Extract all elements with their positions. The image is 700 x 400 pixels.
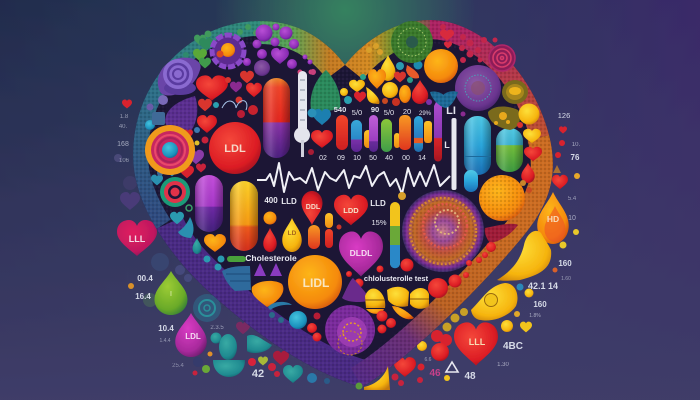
blue and red hearts (308, 108, 333, 155)
labels above capsules: 20 (403, 107, 411, 116)
cholesterol bar chart of capsules (319, 98, 466, 190)
central labels: 15% (371, 218, 387, 227)
right floating numbers: 5.4 (568, 196, 577, 202)
right floating numbers: 6.6 (425, 357, 432, 363)
right floating numbers (425, 111, 581, 382)
labels above capsules (319, 105, 456, 162)
small dots along lower left (192, 322, 330, 384)
heart badge LLL magenta: LLL (129, 234, 146, 244)
purple triangles (254, 263, 282, 276)
purple spiral (158, 58, 201, 96)
heart DDL: DDL (306, 204, 321, 211)
yellow capsule (230, 181, 258, 251)
labels above capsules: 90 (371, 105, 379, 114)
green drop: I (170, 291, 172, 298)
heart LDD: LDD (343, 206, 359, 215)
magenta drop LDL: LDL (185, 332, 201, 341)
orange drop HD (537, 192, 569, 244)
central labels: LLD (370, 199, 386, 208)
red dots near swirl (346, 192, 496, 298)
green dotted mound (310, 69, 340, 111)
large LDL sphere (209, 122, 261, 174)
blue capsule (464, 116, 491, 192)
yellow pills row (365, 287, 429, 319)
thermometer (294, 71, 310, 157)
decorative items outside heart, left side (114, 100, 330, 384)
left floating numbers (117, 114, 264, 380)
large LDL sphere: LDL (224, 143, 246, 155)
ECG line (257, 163, 450, 194)
right floating numbers: 1.60 (561, 276, 571, 282)
central small drops and capsules: LD (288, 230, 297, 237)
decorative items outside heart, right side (392, 111, 581, 386)
purple ring with orange centre (212, 35, 244, 67)
right floating numbers: 10 (568, 215, 576, 222)
purple dotted sphere (325, 305, 375, 355)
purple dotted mound (145, 95, 197, 133)
right floating numbers: 160 (533, 300, 547, 309)
right floating numbers: 1.8% (529, 313, 541, 319)
labels above capsules: 00 (402, 155, 410, 162)
blue block (222, 266, 251, 291)
labels above capsules: 09 (337, 155, 345, 162)
labels above capsules: 40 (385, 155, 393, 162)
labels above capsules: 29% (419, 111, 432, 117)
heart DDL (302, 191, 322, 225)
labels above capsules: 10 (353, 155, 361, 162)
blue green capsule (496, 128, 523, 172)
labels above capsules: 50 (369, 155, 377, 162)
top left cluster (145, 24, 314, 207)
big multicolour dotted swirl (402, 190, 484, 272)
dark red dotted patch (485, 224, 518, 243)
heart LDD (334, 195, 368, 225)
magenta swirl (489, 45, 515, 71)
central labels: chlolusterolle test (364, 274, 429, 283)
orange heart and teal items (170, 205, 246, 270)
right floating numbers: 76 (571, 153, 580, 162)
concentric target (145, 125, 195, 175)
purple capsule (195, 175, 223, 232)
labels above capsules: 02 (319, 155, 327, 162)
central labels: 400 (264, 196, 278, 205)
heart DLDL magenta: DLDL (350, 248, 372, 258)
central small drops and capsules (263, 212, 342, 252)
LIDL sphere (288, 255, 342, 309)
LIDL sphere: LIDL (303, 276, 329, 290)
orange sphere (424, 49, 458, 83)
teal shapes lower left (193, 294, 272, 377)
left floating numbers: 16.4 (135, 292, 151, 301)
labels above capsules: 14 (418, 155, 426, 162)
vertical colour bar (390, 202, 400, 268)
left floating numbers: 00.4 (137, 274, 153, 283)
right small dots (501, 126, 580, 332)
right column sphere and hearts (517, 104, 542, 193)
purple and red small hearts below spiral (151, 127, 208, 185)
labels above capsules: L (444, 140, 450, 150)
left floating numbers: 1.4.4 (159, 338, 171, 344)
yellow bottom shape (356, 366, 390, 390)
heart badge LLL magenta (117, 220, 157, 256)
blue sphere and arcs (268, 302, 322, 342)
green dotted circle (391, 21, 433, 63)
labels above capsules: 5/0 (384, 108, 394, 117)
left floating numbers: 25.4 (172, 363, 184, 369)
capsule red purple (263, 78, 290, 158)
labels above capsules: LI (446, 105, 456, 117)
right floating numbers: 160 (558, 259, 572, 268)
small left hearts (114, 100, 192, 307)
purple sphere (455, 65, 501, 111)
labels above capsules: 540 (334, 105, 346, 114)
left floating numbers: 1.8 (120, 114, 129, 120)
purple blobs (243, 24, 314, 76)
orange drop HD: HD (547, 214, 559, 224)
magenta drop LDL (175, 313, 207, 357)
right floating numbers: 4BC (503, 341, 523, 352)
right floating numbers: 126 (558, 111, 570, 120)
purple blob under LDL heart (342, 278, 370, 302)
heart rim band (133, 20, 553, 387)
labels above capsules: 5/0 (352, 108, 362, 117)
orange dotted sphere (479, 175, 525, 221)
yellow swirl (471, 283, 518, 320)
central labels: Cholesterole (245, 253, 297, 263)
heart body (133, 20, 553, 387)
triangle icon (446, 362, 458, 372)
green drop (154, 271, 188, 315)
left floating numbers: 168 (117, 141, 129, 148)
red hearts cluster (196, 71, 262, 133)
right floating numbers: 48 (464, 371, 476, 382)
right floating numbers: 46 (429, 368, 441, 379)
red blob and heart (392, 330, 452, 386)
right floating numbers: 10. (572, 142, 581, 148)
right floating numbers: 42.1 14 (528, 281, 558, 291)
yellow beads beside rim (442, 308, 468, 332)
green hearts (183, 24, 259, 68)
central labels (245, 196, 429, 283)
yellow blob (497, 231, 551, 281)
left floating numbers: 2.3.5 (210, 325, 224, 331)
small target (160, 177, 190, 207)
olive yellow swirl (488, 80, 528, 130)
blue butterfly (430, 91, 458, 108)
heart DLDL magenta (339, 232, 383, 276)
left floating numbers: 10.4 (158, 324, 174, 333)
central labels: LLD (281, 197, 297, 206)
capsules (336, 98, 466, 190)
red dots beside pills (376, 310, 396, 334)
left floating numbers: 40. (119, 124, 128, 130)
red heart LLL (454, 322, 498, 366)
left floating numbers: 106 (119, 158, 130, 164)
orange triangular heart (252, 281, 283, 307)
right floating numbers: 1.30 (497, 362, 509, 368)
magenta dotted area top right (440, 24, 498, 63)
yellow blob cluster top centre (340, 43, 428, 106)
left floating numbers: 42 (252, 368, 264, 380)
red heart LLL: LLL (469, 337, 486, 347)
